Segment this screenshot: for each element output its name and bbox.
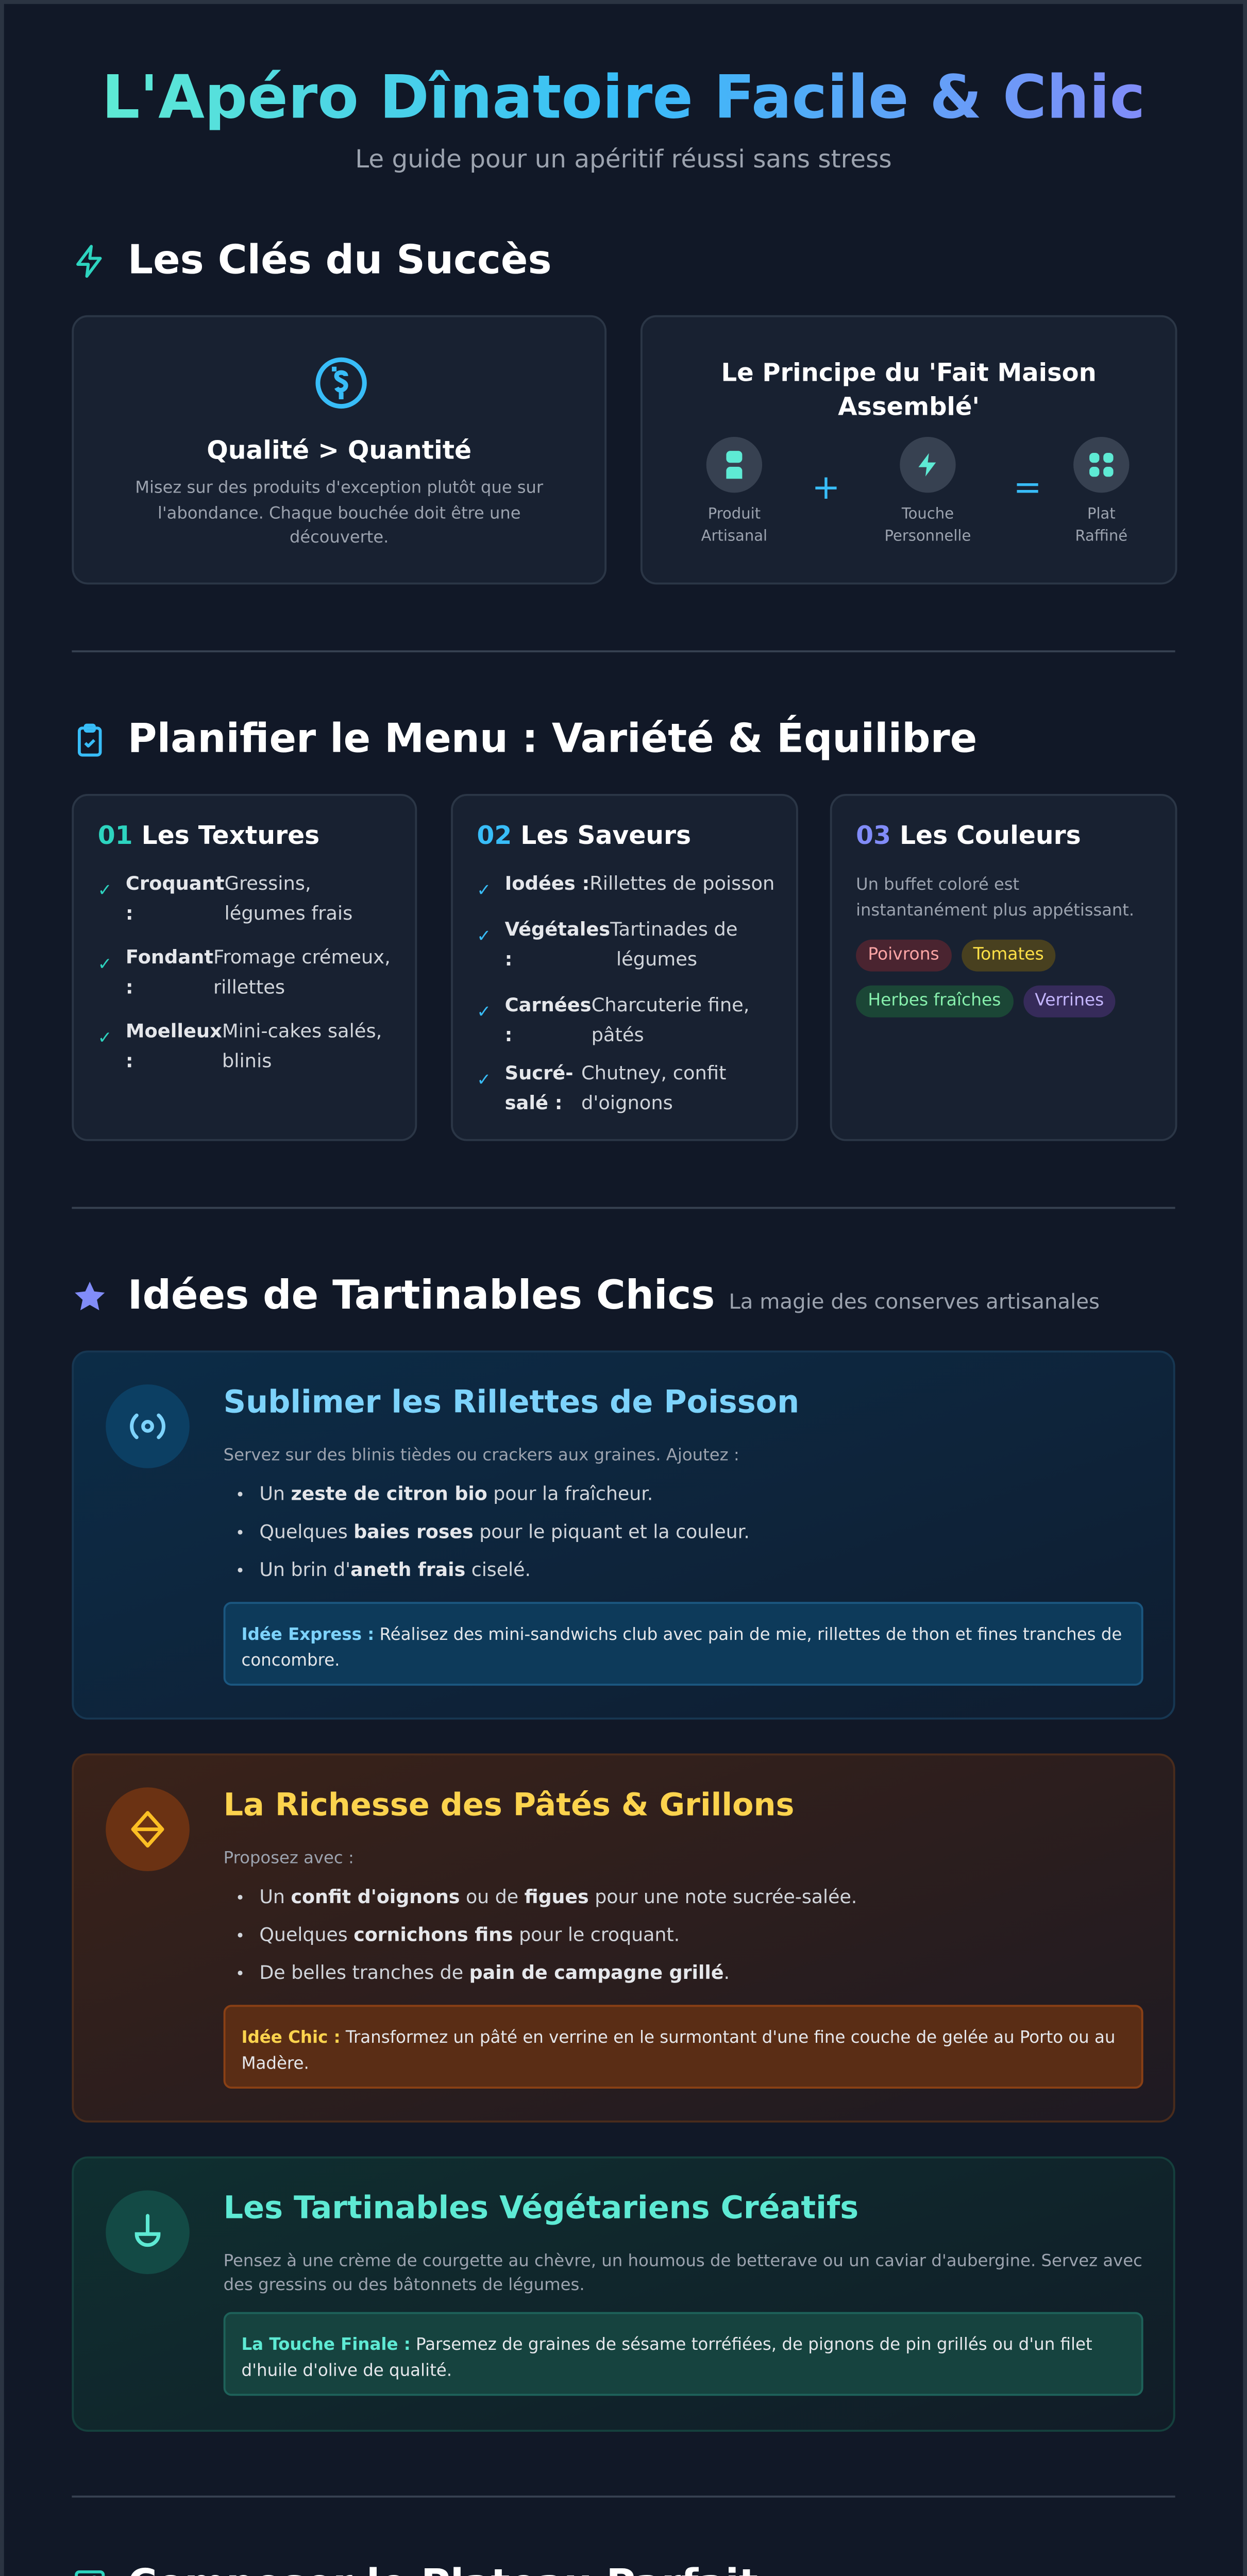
text: Pensez à une crème de courgette au chèvre, un houmous de betterave ou un caviar d'aubergine. Servez avec bbox=[224, 2250, 1142, 2270]
icon: coin bbox=[315, 358, 367, 409]
panel: textures: ✓ bbox=[98, 956, 112, 975]
label: product: Artisanal bbox=[701, 527, 767, 545]
panel: textures: Fondant bbox=[126, 947, 213, 970]
panel: rillettes bbox=[72, 1350, 1175, 1720]
text: Un buffet coloré est bbox=[856, 874, 1019, 894]
text bbox=[224, 2248, 1142, 2296]
text bbox=[856, 874, 1134, 919]
heading: principle bbox=[721, 357, 1097, 421]
pills: Tomates bbox=[973, 945, 1044, 965]
title: L'Apéro Dînatoire Facile & Chic bbox=[102, 64, 1145, 133]
panel: saveurs: ✓ bbox=[477, 927, 491, 947]
pills: Herbes fraîches bbox=[868, 991, 1001, 1011]
pills bbox=[856, 940, 1115, 1018]
panel: textures: Fromage crémeux, bbox=[213, 947, 391, 970]
heading: principle: Assemblé' bbox=[838, 391, 980, 421]
icon: diamond bbox=[106, 1787, 190, 1871]
panel: quality bbox=[72, 315, 606, 584]
text bbox=[135, 477, 543, 547]
panel: textures: ✓ bbox=[98, 882, 112, 902]
icon: touch bbox=[900, 437, 956, 493]
panel: saveurs: ✓ bbox=[477, 1071, 491, 1091]
panel: saveurs: Rillettes de poisson bbox=[589, 874, 774, 896]
panel: textures: rillettes bbox=[213, 977, 285, 999]
text: l'abondance. Chaque bouchée doit être une bbox=[158, 502, 521, 522]
panel: textures: : bbox=[126, 904, 133, 926]
panel: saveurs: salé : bbox=[505, 1093, 562, 1115]
callout: express: Idée Express : Réalisez des mini-sandwichs club avec pain de mie, rillettes de thon et fines tranches de bbox=[242, 1623, 1122, 1643]
text: des gressins ou des bâtonnets de légumes. bbox=[224, 2274, 585, 2294]
label: plate: Plat bbox=[1087, 505, 1116, 522]
bullets: Un confit d'oignons ou de figues pour une note sucrée-salée. bbox=[259, 1887, 857, 1909]
intro: Servez sur des blinis tièdes ou crackers aux graines. Ajoutez : bbox=[224, 1444, 739, 1464]
panel: saveurs: ✓ bbox=[477, 1004, 491, 1023]
panel: textures: Croquant bbox=[126, 874, 224, 896]
icon: bowl bbox=[106, 2190, 190, 2274]
panel: textures: légumes frais bbox=[224, 904, 352, 926]
plus: + bbox=[812, 469, 840, 509]
panel: saveurs: Chutney, confit bbox=[581, 1063, 726, 1085]
panel: saveurs: légumes bbox=[616, 950, 697, 972]
list: textures bbox=[98, 874, 391, 1073]
panel: saveurs bbox=[451, 794, 798, 1141]
label: touch: Personnelle bbox=[885, 527, 971, 545]
panel: pâtés bbox=[72, 1753, 1175, 2123]
panel: saveurs: Charcuterie fine, bbox=[592, 995, 749, 1018]
panel: principle bbox=[641, 315, 1177, 584]
icon: star bbox=[75, 1282, 105, 1311]
panel: saveurs: Sucré- bbox=[505, 1063, 573, 1085]
pills: Poivrons bbox=[868, 945, 939, 965]
callout: touche finale: d'huile d'olive de qualité. bbox=[242, 2359, 452, 2379]
icon: plate bbox=[1073, 437, 1130, 493]
title: Sublimer les Rillettes de Poisson bbox=[224, 1384, 799, 1420]
heading: Idées de Tartinables Chics: Idées de Tartinables Chics La magie des conserves artisanales bbox=[128, 1270, 1100, 1318]
panel: saveurs: Iodées : bbox=[505, 874, 589, 896]
icon: product bbox=[706, 437, 762, 493]
icon: broadcast bbox=[106, 1384, 190, 1468]
text: Misez sur des produits d'exception plutôt que sur bbox=[135, 477, 543, 497]
panel: saveurs: : bbox=[505, 950, 512, 972]
list: saveurs bbox=[477, 874, 774, 1115]
heading: Les Clés du Succès: Les Clés du Succès bbox=[128, 235, 552, 283]
text: instantanément plus appétissant. bbox=[856, 899, 1134, 919]
bullets: Un zeste de citron bio pour la fraîcheur. bbox=[259, 1484, 653, 1506]
callout: chic: Idée Chic : Transformez un pâté en verrine en le surmontant d'une fine couche de gelée au Porto ou au bbox=[242, 2026, 1116, 2046]
title: La Richesse des Pâtés & Grillons bbox=[224, 1787, 794, 1823]
bullets: Quelques baies roses pour le piquant et la couleur. bbox=[259, 1522, 750, 1544]
heading: 03: 03 Les Couleurs bbox=[856, 820, 1081, 850]
callout: touche finale: La Touche Finale : Parsemez de graines de sésame torréfiées, de pignons de pin grillés ou d'un filet bbox=[242, 2333, 1092, 2353]
label: product bbox=[701, 505, 767, 545]
panel: saveurs: : bbox=[505, 1025, 512, 1047]
heading: Qualité > Quantité: Qualité > Quantité bbox=[207, 435, 471, 465]
heading: Planifier le Menu: Planifier le Menu : Variété & Équilibre bbox=[128, 714, 977, 762]
panel: textures: blinis bbox=[222, 1052, 272, 1073]
label: plate bbox=[1075, 505, 1127, 545]
bullets bbox=[224, 1476, 750, 1590]
panel: textures: : bbox=[126, 977, 133, 999]
text: découverte. bbox=[290, 527, 389, 547]
callout: touche finale bbox=[224, 2312, 1143, 2396]
heading: 02: 02 Les Saveurs bbox=[477, 820, 691, 850]
callout: express bbox=[224, 1602, 1143, 1686]
label: touch bbox=[885, 505, 971, 545]
bullets: Quelques cornichons fins pour le croquant. bbox=[259, 1925, 680, 1947]
panel: saveurs: pâtés bbox=[592, 1025, 644, 1047]
icon: lightning bbox=[76, 245, 102, 278]
callout: chic bbox=[224, 2005, 1143, 2089]
callout: chic: Madère. bbox=[242, 2052, 309, 2072]
heading: principle: Le Principe du 'Fait Maison bbox=[721, 357, 1097, 387]
panel: couleurs bbox=[830, 794, 1177, 1141]
subtitle: Le guide pour un apéritif réussi sans stress bbox=[355, 144, 892, 174]
callout: express: concombre. bbox=[242, 1649, 340, 1669]
panel: textures: : bbox=[126, 1052, 133, 1073]
intro: Proposez avec : bbox=[224, 1847, 354, 1867]
heading: 01: 01 Les Textures bbox=[98, 820, 319, 850]
panel: saveurs: Carnées bbox=[505, 995, 592, 1018]
panel: saveurs: ✓ bbox=[477, 882, 491, 902]
panel: textures: Gressins, bbox=[224, 874, 311, 896]
panel: saveurs: Tartinades de bbox=[610, 920, 738, 942]
title: Les Tartinables Végétariens Créatifs bbox=[224, 2190, 858, 2226]
panel: saveurs: d'oignons bbox=[581, 1093, 673, 1115]
icon: clipboard bbox=[78, 723, 102, 756]
label: product: Produit bbox=[708, 505, 761, 522]
panel: textures: Moelleux bbox=[126, 1021, 222, 1043]
panel: végétariens bbox=[72, 2157, 1175, 2432]
panel: textures: Mini-cakes salés, bbox=[222, 1021, 382, 1043]
label: plate: Raffiné bbox=[1075, 527, 1127, 545]
bullets bbox=[224, 1879, 857, 1993]
label: touch: Touche bbox=[902, 505, 954, 522]
pills: Verrines bbox=[1035, 991, 1104, 1011]
bullets: De belles tranches de pain de campagne grillé. bbox=[259, 1963, 730, 1985]
icon: image bbox=[72, 2567, 108, 2576]
equals: = bbox=[1013, 469, 1042, 509]
bullets: Un brin d'aneth frais ciselé. bbox=[259, 1560, 531, 1582]
panel: textures bbox=[72, 794, 417, 1141]
panel: textures: ✓ bbox=[98, 1029, 112, 1049]
panel: saveurs: Végétales bbox=[505, 920, 610, 942]
